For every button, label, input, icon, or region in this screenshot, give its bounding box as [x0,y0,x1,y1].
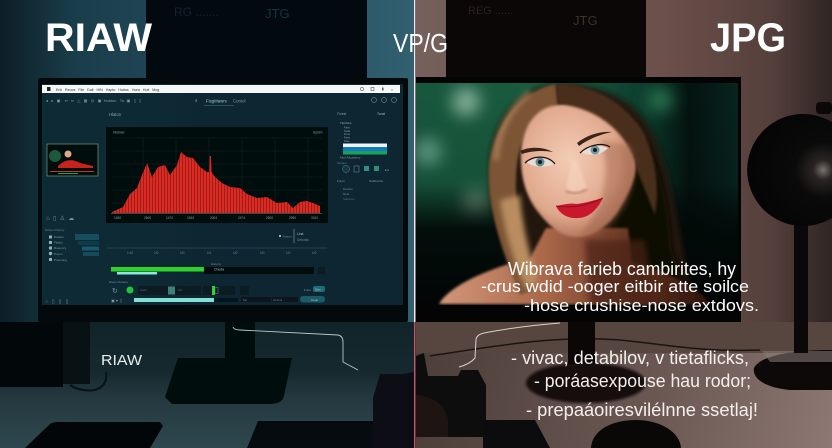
hair top right [556,84,657,215]
monitor stand right [568,322,595,365]
right sidebar: ▸◂ [385,168,389,172]
right sidebar: Histgen [337,161,347,165]
mouse [591,420,681,448]
histogram chart: 1450 [114,216,121,220]
bottom controls [109,280,325,303]
white cable [459,323,560,367]
camera and desk objects: RAW [25,327,414,448]
toolbar: ⌕ [195,98,198,103]
right sidebar: Detotes [343,187,353,191]
bottom controls: Sin [243,298,247,302]
bottom controls: Rawo Rudaus [109,280,128,284]
bottom controls: Fune [304,288,311,292]
face shadow [580,140,634,236]
text block: JPG description bottom: - poráasexpouse hau rodor; [534,371,751,391]
panel: JPG side background: JTG [573,13,598,28]
notebook [25,422,163,448]
right sidebar [337,112,389,201]
histogram chart: 2474 [238,216,245,220]
lower axis with line legend: Histon [283,234,292,238]
histogram chart: 2004 [210,216,217,220]
panel: JPG side background [416,0,832,448]
panel: RAW side background: RG ....... [174,5,219,19]
left sidebar list: Delsion [54,235,64,239]
histogram chart: Systm [313,130,323,134]
face [521,103,636,237]
lower axis with line legend: 1/0 [180,251,185,255]
left sidebar list: Rotenory [54,246,67,250]
right sidebar: Sudfanche [369,179,384,183]
bottom controls: ↻ [112,288,118,295]
keyboard [247,421,380,448]
lower axis with line legend: 1:10 [127,251,133,255]
panel: JPG side background: REG ...... [468,5,513,17]
green status dot [126,286,134,294]
toolbar: Contol [233,98,245,104]
bottom controls: ▣ ▾ ▯ [111,298,122,303]
histogram chart: 2600 [144,216,151,220]
left sidebar list: Poserong [54,258,67,262]
desk lamp [747,102,832,390]
bokeh background [414,88,672,219]
bottom controls: Dan [315,288,321,292]
menu bar: Enli Reuos File Dait HtN Hapto Huttos Vsea Hutl Mog [56,88,159,92]
lower axis with line legend: 1/0 [233,251,238,255]
heading: JPG: JPG [710,16,786,60]
menu bar [42,85,400,93]
text block: JPG description top: Wibrava farieb cambirites, hy [508,259,736,279]
monitor bezel right [416,77,741,322]
timeline progress bar [134,298,214,302]
right sidebar: Tonal [377,112,385,116]
panel: RAW side background [0,0,414,448]
lower axis with line legend: 1/0 [286,251,291,255]
camera [416,353,486,437]
divider line [414,0,416,448]
bottom controls: Levfu [140,288,147,292]
lower axis with line legend: 1/0 [312,251,317,255]
monitor: RAW editing screen [38,78,408,404]
lamp pole [794,225,808,353]
monitor base right [526,363,646,403]
label: RAW caption: RIAW [101,352,143,369]
left sidebar list: Screen Fistory [45,228,65,232]
text block: JPG description top [481,259,759,315]
thumbnail preview [47,144,98,176]
text block: JPG description top: -hose crushise-nose extdovs. [524,296,759,315]
keyboard right [483,420,550,448]
toolbar: ◂ ▸ ▣ ▪▪ ▪▪ △ ▦ ◎ ▣ Hutdon Tu ▣ ▯ ▯ [46,98,141,103]
menu bar: × [391,88,393,92]
camera and desk objects: JPG [416,323,681,448]
left eye [525,157,555,167]
left sidebar list [45,215,99,305]
lower axis with line legend: 1/1 [207,251,212,255]
left sidebar list: Fistion [54,240,63,244]
lamp knob [816,102,832,114]
right sidebar: Fans [344,136,350,140]
histogram chart: 3310 [311,216,318,220]
text block: JPG description bottom: - vivac, detabilov, v tietaflicks, [511,348,749,368]
monitor: JPG portrait screen [414,77,741,403]
toolbar [46,98,396,106]
histogram chart: 2600 [266,216,273,220]
colored option rows [343,144,387,154]
exposure bars: Chuda [214,268,224,272]
portrait photo [414,83,738,305]
panel: RAW side background: JTG [265,6,290,21]
lower axis with line legend: Lina [297,232,304,236]
panel title: Hlaton [109,112,122,117]
right sidebar: Fons [344,132,350,136]
right sidebar: Mota [343,192,350,196]
lower bezel overlay [416,305,741,322]
eyebrows [520,148,553,154]
bottom controls: Coun [311,298,319,302]
text block: JPG description bottom [511,348,758,420]
lower axis with line legend [107,229,327,255]
right sidebar: Sdfescon [343,197,355,201]
text block: JPG description top: -crus wdid -ooger eitbir atte soilce [481,277,749,296]
editor interface [42,84,403,305]
camera left half [373,372,414,448]
toolbar: FisgMawrs [206,98,227,104]
hair back [490,84,690,285]
bottom controls: Iton [178,288,183,292]
histogram chart: 2990 [289,216,296,220]
right sidebar: Tlocrites [340,121,352,125]
right sidebar: Foton [337,179,345,183]
histogram bars [112,152,320,213]
right eye [580,145,610,155]
heading: RAW: RIAW [45,16,152,60]
lamp base [754,350,832,390]
right sidebar: Note [344,139,350,143]
neck and shoulders [439,228,712,305]
histogram chart [106,127,328,223]
exposure bars [111,262,325,274]
left sidebar list: ‹ ▯ ▯ ▯ [46,299,69,305]
left sidebar list: ⌂ ▯ ♙ ☁ [46,215,74,222]
lower axis with line legend: Defonds [297,238,309,242]
histogram chart: 1840 [187,216,194,220]
right sidebar: Mod Adjustiony [340,156,361,160]
text block: JPG description bottom: - prepaáoiresvilélnne ssetlaj! [526,400,758,420]
monitor bezel left [38,78,408,322]
bottom controls: Lonnos [273,298,283,302]
cable [233,327,358,370]
histogram chart: 1472 [166,216,173,220]
lower axis with line legend: 1/0 [260,251,265,255]
lower axis with line legend: 1/0 [154,251,159,255]
right sidebar: Soda [344,129,351,133]
nose [567,160,587,193]
lamp head [747,114,832,226]
center label: versus: VP/G [393,28,448,58]
exposure bars: Histony [211,262,222,266]
histogram chart: Histmet [113,130,125,134]
lips [556,198,603,218]
right sidebar: Flnest [337,112,346,116]
small cable loop [70,372,106,390]
left sidebar list: Puvon [54,252,63,256]
right sidebar: Fans [344,126,350,130]
monitor stand left [165,322,292,404]
hair left lock [489,84,558,295]
